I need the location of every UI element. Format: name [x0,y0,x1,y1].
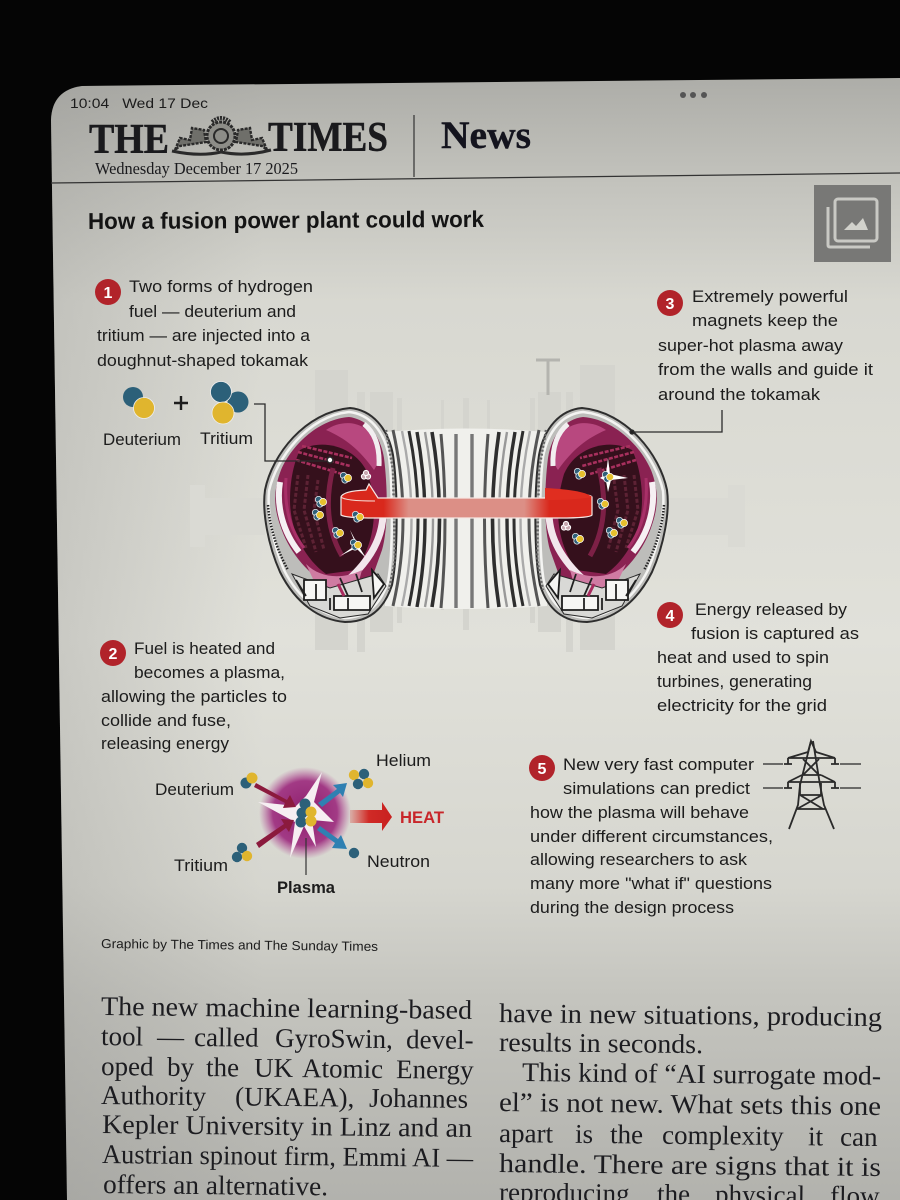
article text: right column: apart [499,1118,554,1149]
article text: left column: (UKAEA), [235,1081,354,1113]
fusion reaction diagram: Neutron [367,852,430,871]
article text: left column: called [194,1022,259,1053]
leader line: tritium to chamber [254,404,333,463]
fusion reaction diagram: HEAT [400,808,445,827]
callout 2: plasma: collide and fuse, [101,711,231,730]
article text: left column: Authority [101,1080,207,1111]
fusion reaction diagram [155,751,445,897]
fusion reaction diagram: Plasma [277,878,336,897]
article text: left column: tool [101,1021,143,1051]
article text: left column: Energy [396,1054,474,1085]
callout 4: energy: turbines, generating [657,672,812,691]
article text: left column: GyroSwin, [275,1023,393,1054]
title: How a fusion power plant could work [88,206,484,234]
article text: left column: Johannes [369,1083,468,1114]
icon: image gallery [814,185,891,262]
callout 5: simulations: allowing researchers to ask [530,850,748,869]
article text: right column: complexity [662,1120,784,1151]
fuel particles in chamber [312,458,628,558]
masthead: The Times: THE [89,117,169,163]
deuterium and tritium molecules: Tritium [200,429,253,448]
article text: right column: is [575,1119,593,1149]
article text: left column: the [206,1052,239,1082]
callout 5: simulations [529,755,773,917]
callout 1: fuel: fuel — deuterium and [129,302,296,321]
callout 5: simulations: how the plasma will behave [530,803,749,822]
article text: left column: Atomic [302,1053,383,1084]
fusion reaction diagram: Helium [376,751,431,770]
callout 4: energy: Energy released by [695,600,848,619]
callout 4: energy: heat and used to spin [657,648,829,667]
tokamak central coils [385,428,547,609]
credit line: Graphic by The Times and The Sunday Times [101,936,379,954]
article text: left column: devel- [406,1024,474,1055]
status bar: 10:04 Wed 17 Dec [70,96,208,111]
callout 4: energy: fusion is captured as [691,624,859,643]
masthead: The Times: TIMES [268,115,388,161]
callout 3: magnets: super-hot plasma away [658,336,844,355]
article text: right column: have in new situations, producing [499,998,882,1032]
callout 3: magnets [657,287,873,404]
article text: left column: by [167,1052,195,1082]
plasma glow [259,767,351,859]
tokamak background structure [190,360,745,652]
red plasma flow arrow [341,484,592,518]
fusion reaction diagram: Tritium [174,856,228,875]
callout 3: magnets: from the walls and guide it [658,360,873,379]
callout 3: magnets: 3 [666,296,675,313]
article text: left column: — [156,1022,185,1052]
fusion reaction diagram: Deuterium [155,780,234,799]
callout 5: simulations: New very fast computer [563,755,754,774]
masthead: The Times: News [441,114,531,157]
tokamak cutaway: left chamber [264,408,397,622]
article text: right column [499,998,882,1200]
callout 4: energy: 4 [666,608,675,625]
callout 3: magnets: around the tokamak [658,385,821,404]
article text: left column: Austrian spinout firm, Emmi AI — [102,1139,474,1173]
article text: left column: UK [254,1053,294,1083]
callout 5: simulations: under different circumstances, [530,827,773,846]
callout 2: plasma: Fuel is heated and [134,639,275,658]
article text: left column: oped [101,1051,154,1082]
status bar [70,92,707,111]
callout 5: simulations: 5 [538,761,547,778]
article text: right column: it [808,1121,824,1151]
article text: right column: handle. There are signs that it is [499,1148,881,1182]
article text: right column: el” is not new. What sets this one [499,1087,881,1121]
callout 1: fuel [95,277,313,370]
article text: right column: results in seconds. [499,1027,703,1059]
callout 1: fuel: 1 [104,285,113,302]
callout 2: plasma: allowing the particles to [101,687,287,706]
masthead: The Times [89,114,531,178]
callout 2: plasma: 2 [109,646,118,663]
callout 5: simulations: simulations can predict [563,779,750,798]
callout 3: magnets: Extremely powerful [692,287,848,306]
article text: right column: This kind of “AI surrogate mod- [522,1057,881,1091]
callout 3: magnets: magnets keep the [692,311,838,330]
article text: right column: can [840,1122,878,1152]
icon: electricity pylon [763,741,861,829]
callout 2: plasma: becomes a plasma, [134,663,285,682]
deuterium and tritium molecules [103,382,253,449]
callout 1: fuel: doughnut-shaped tokamak [97,351,309,370]
callout 2: plasma [100,639,287,753]
deuterium and tritium molecules: Deuterium [103,430,181,449]
leader line: magnets [630,410,722,434]
callout 4: energy [657,600,859,715]
tokamak cutaway: right chamber [535,408,668,622]
masthead: The Times: Wednesday December 17 2025 [95,159,298,178]
article text: left column: Kepler University in Linz and an [102,1109,473,1143]
article text: left column [101,991,474,1200]
callout 5: simulations: during the design process [530,898,734,917]
article text: right column: the [610,1119,643,1150]
article text: left column: The new machine learning-based [101,991,473,1025]
callout 1: fuel: tritium — are injected into a [97,326,311,345]
callout 2: plasma: releasing energy [101,734,229,753]
callout 1: fuel: Two forms of hydrogen [129,277,313,296]
callout 5: simulations: many more "what if" questions [530,874,772,893]
callout 4: energy: electricity for the grid [657,696,827,715]
